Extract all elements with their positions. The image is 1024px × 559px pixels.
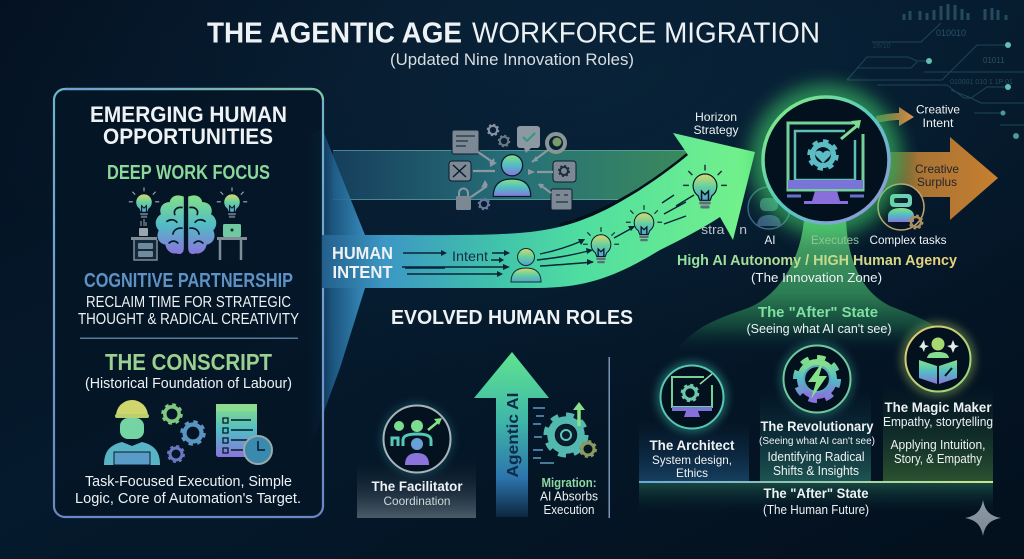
icon: lightbulb 1 [583,227,619,263]
heading: after state [746,304,892,336]
text: magic maker skills: Empathy, storytelling [883,415,993,429]
panel: the magic maker [883,321,993,482]
funnel into human intent [308,128,365,455]
text: magic maker skills: Applying Intuition, [890,438,986,452]
panel: the revolutionary [759,341,875,482]
subtitle: (Updated Nine Innovation Roles) [390,51,634,69]
text: task-focused execution: Task-Focused Execution, Simple [85,473,292,490]
text: orchestration (partly hidden): Orchestration [663,222,747,237]
text: the architect: The Architect [650,437,735,453]
icon: lightbulb 3 [683,165,727,209]
background circuit pattern: 010001 010 1 1P 01 [950,79,1013,86]
title [207,18,820,50]
text: reclaim time [78,294,299,328]
arrow: agentic AI [474,352,549,517]
text: migration: Execution [544,502,594,517]
text: creative intent: Intent [922,116,954,130]
text: architect skills [652,453,732,480]
icon: revolutionary gear with bolt [796,358,838,400]
icon: person with intent [511,248,541,282]
background circuit pattern: 010010 [936,28,966,38]
baseline band [639,481,993,513]
icon: architect monitor [672,374,712,417]
text: revolutionary skills: Shifts & Insights [773,464,859,478]
labels: AI, executes, complex tasks [764,233,946,247]
icon: AI robot circle [748,187,790,229]
heading: innovation zone: (The Innovation Zone) [751,270,882,285]
arrows: intent streams [402,195,694,277]
text: creative surplus [915,162,959,189]
heading: innovation zone [677,252,958,285]
arrow: creative surplus [885,137,998,220]
heading: evolved human roles: EVOLVED HUMAN ROLES [391,307,633,329]
text: human intent: INTENT [332,262,393,282]
text: coordination: Coordination [384,494,450,508]
text: task-focused execution [75,473,301,507]
text: magic maker skills [883,415,993,466]
band: task migration channel [333,150,690,200]
text: after state human future: The "After" State [764,485,869,501]
icon: complex tasks robot circle [878,184,924,230]
labels: AI, executes, complex tasks: Complex tasks [870,233,946,247]
icon: brain with desks and bulbs [129,187,247,260]
heading: emerging human opportunities: OPPORTUNITIES [103,124,273,149]
text: magic maker skills: Story, & Empathy [894,452,983,466]
text: human intent [332,243,393,282]
icon: monitor with gear and heart [787,120,864,204]
text: the magic maker: The Magic Maker [884,399,992,415]
green cone below central circle [675,220,962,352]
text: after state human future [763,485,869,517]
central innovation circle [750,84,902,236]
labels: AI, executes, complex tasks: AI [764,233,776,247]
background circuit pattern: 26/10 [873,43,891,50]
text: creative surplus: Surplus [917,175,957,189]
heading: deep work focus: DEEP WORK FOCUS [107,162,270,184]
icon: worker, gears and checklist [104,400,272,465]
arrow: human intent rising to innovation [322,133,755,288]
text: migration: Migration: [542,475,596,490]
text: horizon strategy: Strategy [694,123,738,137]
text: horizon strategy: Horizon [695,110,737,124]
icon: lightbulb 2 [626,205,662,241]
text: human intent: HUMAN [332,243,393,263]
icon: magic maker book [919,338,959,384]
text: the revolutionary: The Revolutionary [760,418,874,434]
heading: innovation zone: High AI Autonomy / HIGH Human Agency [677,252,958,269]
text: revolutionary skills: (Seeing what AI can't see) [759,435,875,447]
icon: person surrounded by task icons [449,125,576,210]
text: historical foundation: (Historical Foundation of Labour) [85,375,292,392]
panel: the facilitator [357,402,476,518]
text: reclaim time: RECLAIM TIME FOR STRATEGIC [86,294,291,311]
text: task-focused execution: Logic, Core of Automation's Target. [75,490,301,507]
text: migration [540,475,598,517]
heading: the conscript: THE CONSCRIPT [105,349,272,375]
heading: after state: The "After" State [758,304,878,321]
text: architect skills: System design, [652,453,732,467]
text: creative intent [916,102,960,130]
text: after state human future: (The Human Future) [763,502,869,517]
text: intent label: Intent [452,248,488,264]
heading: emerging human opportunities: EMERGING HUMAN [90,102,287,127]
title: WORKFORCE MIGRATION [472,18,820,50]
text: revolutionary skills: Identifying Radical [768,450,864,464]
text: creative surplus: Creative [915,162,959,176]
text: architect skills: Ethics [676,466,708,480]
panel: the architect [639,361,749,482]
labels: AI, executes, complex tasks: Executes [811,233,859,247]
heading: cognitive partnership: COGNITIVE PARTNERSHIP [84,270,293,292]
text: reclaim time: THOUGHT & RADICAL CREATIVITY [78,311,299,328]
text: agentic AI: Agentic AI [505,392,522,478]
background circuit pattern [847,4,1024,139]
text: the facilitator: The Facilitator [372,478,463,494]
icon: facilitator group [392,418,442,465]
heading: emerging human opportunities [90,102,287,149]
text: revolutionary skills [759,435,875,478]
text: horizon strategy [694,110,738,137]
heading: after state: (Seeing what AI can't see) [746,321,892,336]
arrow: creative intent [876,107,914,126]
icon: sparkle [965,500,1001,536]
text: creative intent: Creative [916,102,960,116]
icon: migration gear [533,402,596,463]
panel: emerging human opportunities [54,89,323,517]
title: THE AGENTIC AGE [207,18,462,50]
background circuit pattern: 01011 [983,56,1005,65]
text: migration: AI Absorbs [540,488,598,504]
